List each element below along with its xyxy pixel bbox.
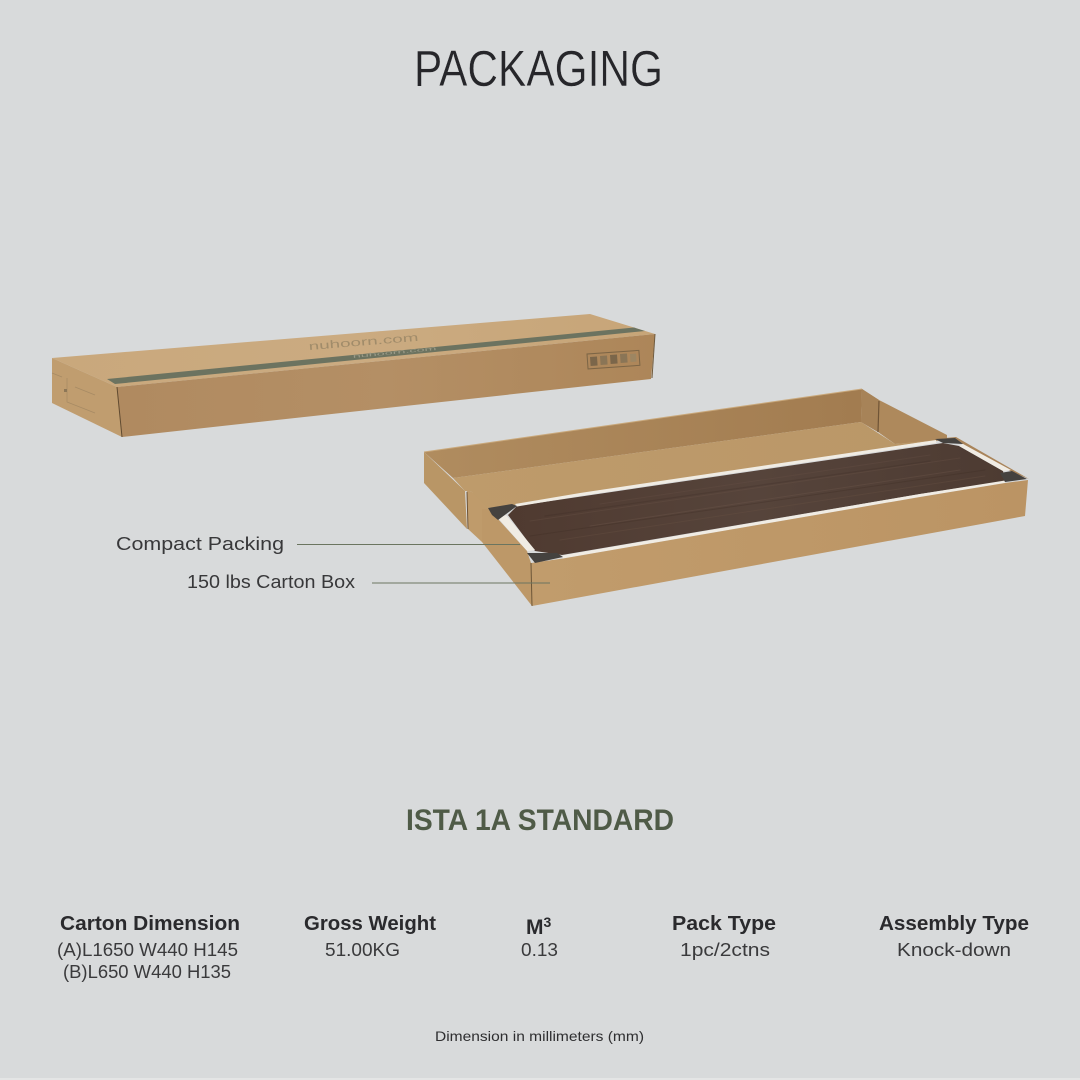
closed box: end face — [52, 358, 122, 437]
spec: pack type: Pack Type — [672, 913, 776, 935]
footnote: Dimension in millimeters (mm) — [435, 1028, 644, 1044]
spec: carton dimension: Carton Dimension — [60, 913, 240, 935]
spec: carton dimension: (A)L1650 W440 H145 — [57, 940, 238, 960]
subheading: standard: ISTA 1A STANDARD — [406, 804, 674, 837]
callout: carton box: 150 lbs Carton Box — [187, 572, 355, 592]
title: PACKAGING — [414, 40, 663, 97]
closed box: end panel label — [52, 373, 95, 413]
spec: gross weight — [304, 913, 436, 960]
open box: tabletop — [508, 443, 1005, 555]
open box: inner flap face — [467, 491, 490, 542]
spec: gross weight: Gross Weight — [304, 913, 436, 935]
spec: pack type: 1pc/2ctns — [680, 940, 770, 960]
spec: volume — [521, 914, 558, 960]
spec: volume: 0.13 — [521, 940, 558, 960]
closed box: front face — [117, 334, 655, 437]
spec: carton dimension: (B)L650 W440 H135 — [63, 962, 231, 982]
open box: right rim — [945, 437, 1029, 479]
closed box: brand text: nuhoorn.com — [308, 332, 419, 353]
spec: volume: 3 — [544, 914, 552, 930]
open carton box with tabletop — [424, 389, 1029, 606]
open box: back wall — [424, 389, 862, 478]
open box: floor — [453, 422, 936, 508]
callout: compact packing: Compact Packing — [116, 534, 284, 554]
spec: pack type — [672, 913, 776, 960]
closed box: top face — [52, 314, 655, 387]
open box: right wall — [861, 389, 947, 444]
spec: volume: M — [526, 916, 544, 939]
open box: front face — [531, 480, 1028, 606]
open box: left outer flap — [424, 452, 467, 529]
spec: assembly type — [879, 913, 1029, 960]
closed box: shipping icons — [587, 350, 640, 369]
open box: white foam strips — [498, 440, 1011, 558]
spec: carton dimension — [57, 913, 240, 982]
closed box: brand text on tape: nuhoorn.com — [353, 346, 437, 360]
open box: front-left outer flap — [482, 509, 532, 606]
spec: gross weight: 51.00KG — [325, 940, 400, 960]
spec: assembly type: Assembly Type — [879, 913, 1029, 935]
closed box: green tape stripe — [107, 328, 645, 384]
closed carton box — [52, 314, 655, 437]
spec: assembly type: Knock-down — [897, 940, 1011, 960]
open box: dark corner protectors — [488, 438, 1027, 563]
